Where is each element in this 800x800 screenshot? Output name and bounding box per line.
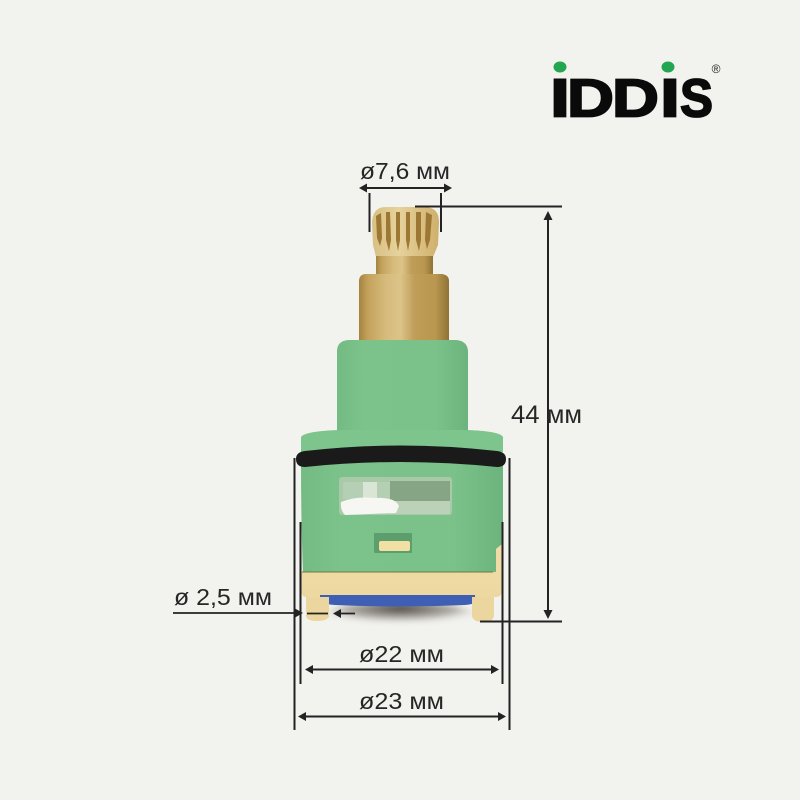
green flange	[301, 430, 503, 452]
logo: IDDIS: I	[660, 68, 680, 128]
green lower body	[301, 462, 503, 573]
label: stem diameter: ø7,6 мм	[360, 158, 450, 184]
right pin	[472, 597, 494, 622]
label: pin diameter: ø 2,5 мм	[174, 584, 272, 610]
black o-ring	[296, 446, 506, 467]
label: inner diameter: ø22 мм	[359, 641, 444, 667]
dimension: outer diameter	[294, 458, 510, 730]
logo: IDDIS: D	[567, 68, 614, 128]
green upper body	[337, 340, 468, 432]
icon: logo green dot left	[554, 62, 566, 72]
icon: logo green dot right	[662, 62, 674, 72]
dimension: height	[415, 206, 582, 622]
brass collar	[359, 274, 449, 340]
logo registered mark: ®	[712, 62, 721, 76]
logo: IDDIS	[550, 62, 721, 128]
label: height: 44 мм	[511, 401, 582, 429]
dimension: inner diameter	[300, 522, 502, 684]
dimension: stem diameter	[359, 158, 452, 232]
logo: IDDIS: D	[612, 68, 659, 128]
small window with latch	[374, 533, 412, 553]
beige base ring	[301, 544, 502, 597]
side window	[339, 477, 452, 515]
dimension: pin diameter	[173, 584, 355, 618]
brass knurled stem	[372, 207, 439, 274]
label: outer diameter: ø23 мм	[359, 688, 444, 714]
shadow under cartridge	[324, 602, 476, 628]
logo: IDDIS: S	[680, 68, 713, 128]
logo: IDDIS: I	[550, 68, 570, 128]
left pin	[306, 597, 329, 621]
product: cartridge	[296, 207, 506, 628]
blue seal	[320, 595, 475, 606]
